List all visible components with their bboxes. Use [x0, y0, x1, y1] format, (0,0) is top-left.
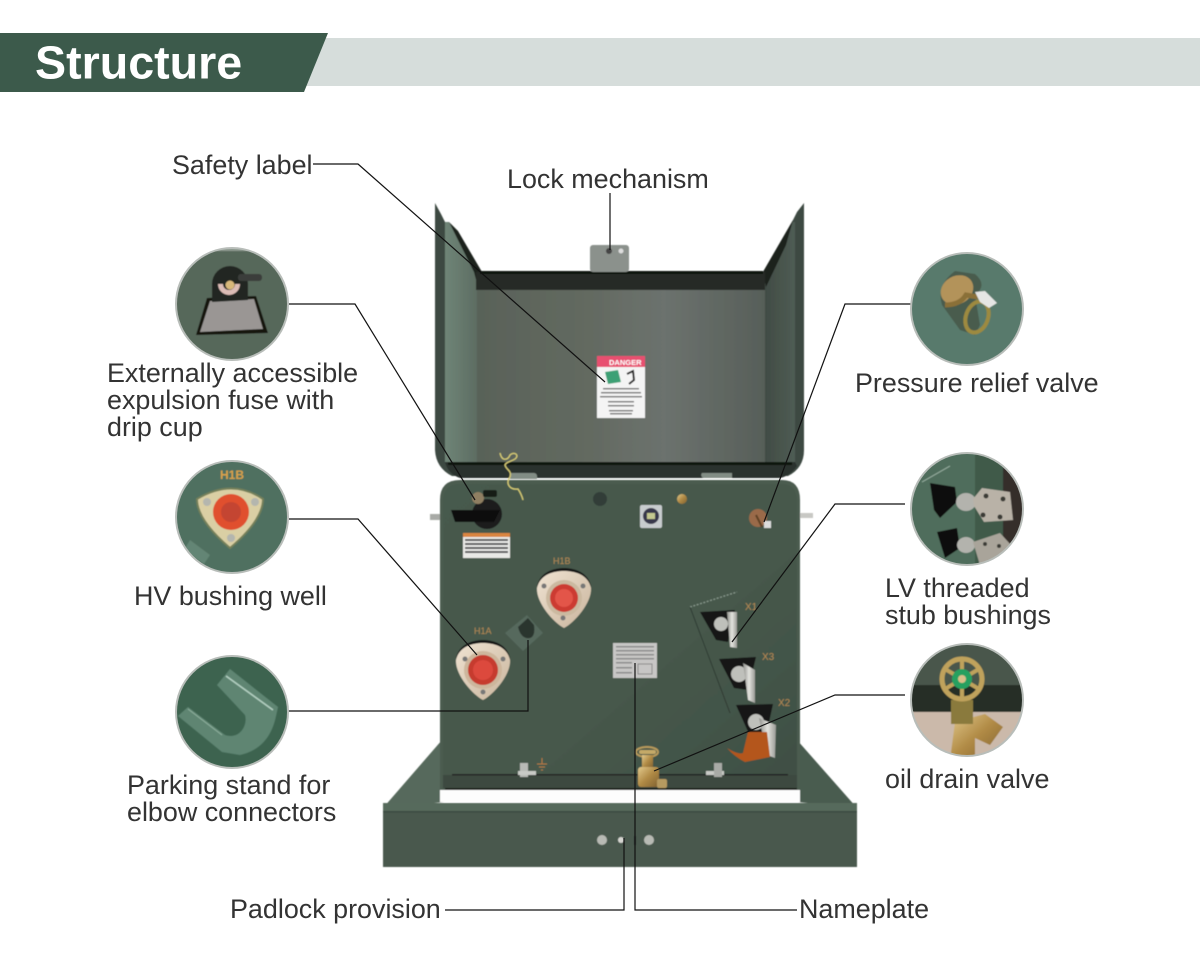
- parking stand: [505, 615, 543, 651]
- nameplate: [613, 643, 657, 678]
- detail: oil drain valve: [910, 643, 1024, 757]
- danger label: DANGER: [609, 358, 642, 367]
- label: lock mechanism: Lock mechanism: [507, 164, 709, 194]
- label: expulsion fuse: Externally accessible: [107, 358, 358, 388]
- lock tab: [590, 245, 629, 272]
- label: parking stand: elbow connectors: [127, 797, 336, 827]
- open lid: [435, 203, 804, 478]
- leader lines: [288, 164, 911, 910]
- detail: HV bushing: [175, 460, 289, 574]
- label: LV threaded stub bushings: LV threaded: [885, 573, 1030, 603]
- label: expulsion fuse: drip cup: [107, 412, 203, 442]
- header banner: [0, 33, 1200, 92]
- H1A bushing: H1A: [474, 626, 492, 636]
- LV stub bushings: X2: [778, 698, 791, 709]
- oil drain valve: [636, 747, 667, 788]
- transformer product photo: [383, 203, 857, 867]
- detail: pressure relief valve: [910, 252, 1024, 366]
- detail: LV stub bushings: [910, 452, 1024, 566]
- LV stub bushings: X3: [762, 652, 775, 663]
- H1B bushing: [537, 556, 591, 628]
- hinges: [510, 473, 732, 479]
- label: expulsion fuse: [107, 358, 358, 442]
- top fittings: [593, 492, 687, 528]
- label: parking stand: Parking stand for: [127, 770, 330, 800]
- danger label: [597, 356, 645, 418]
- yellow wire: [500, 453, 523, 500]
- label: pressure relief valve: Pressure relief valve: [855, 368, 1099, 398]
- warning label: [463, 533, 510, 558]
- label: safety label: Safety label: [172, 150, 313, 180]
- ground lugs: [518, 758, 724, 777]
- detail: HV bushing: H1B: [220, 468, 244, 482]
- LV stub bushings: [690, 592, 791, 762]
- label: oil drain valve: oil drain valve: [885, 764, 1049, 794]
- label: parking stand: [127, 770, 336, 827]
- LV stub bushings: X1: [745, 602, 758, 613]
- title: Structure: [35, 36, 242, 88]
- detail: parking stand: [175, 655, 289, 769]
- label: LV threaded stub bushings: stub bushings: [885, 600, 1051, 630]
- label: expulsion fuse: expulsion fuse with: [107, 385, 334, 415]
- pressure relief valve: [749, 509, 771, 528]
- side bolts: [430, 513, 813, 520]
- fuse handle: [451, 490, 502, 529]
- detail: expulsion fuse: [175, 247, 289, 361]
- main body panel: [440, 480, 800, 790]
- door knobs: [597, 835, 654, 845]
- label: nameplate: Nameplate: [799, 894, 929, 924]
- H1B bushing: H1B: [553, 556, 571, 566]
- label: HV bushing well: HV bushing well: [134, 581, 327, 611]
- label: LV threaded stub bushings: [885, 573, 1051, 630]
- front tray: [383, 740, 857, 867]
- H1A bushing: [456, 626, 510, 700]
- label: padlock provision: Padlock provision: [230, 894, 441, 924]
